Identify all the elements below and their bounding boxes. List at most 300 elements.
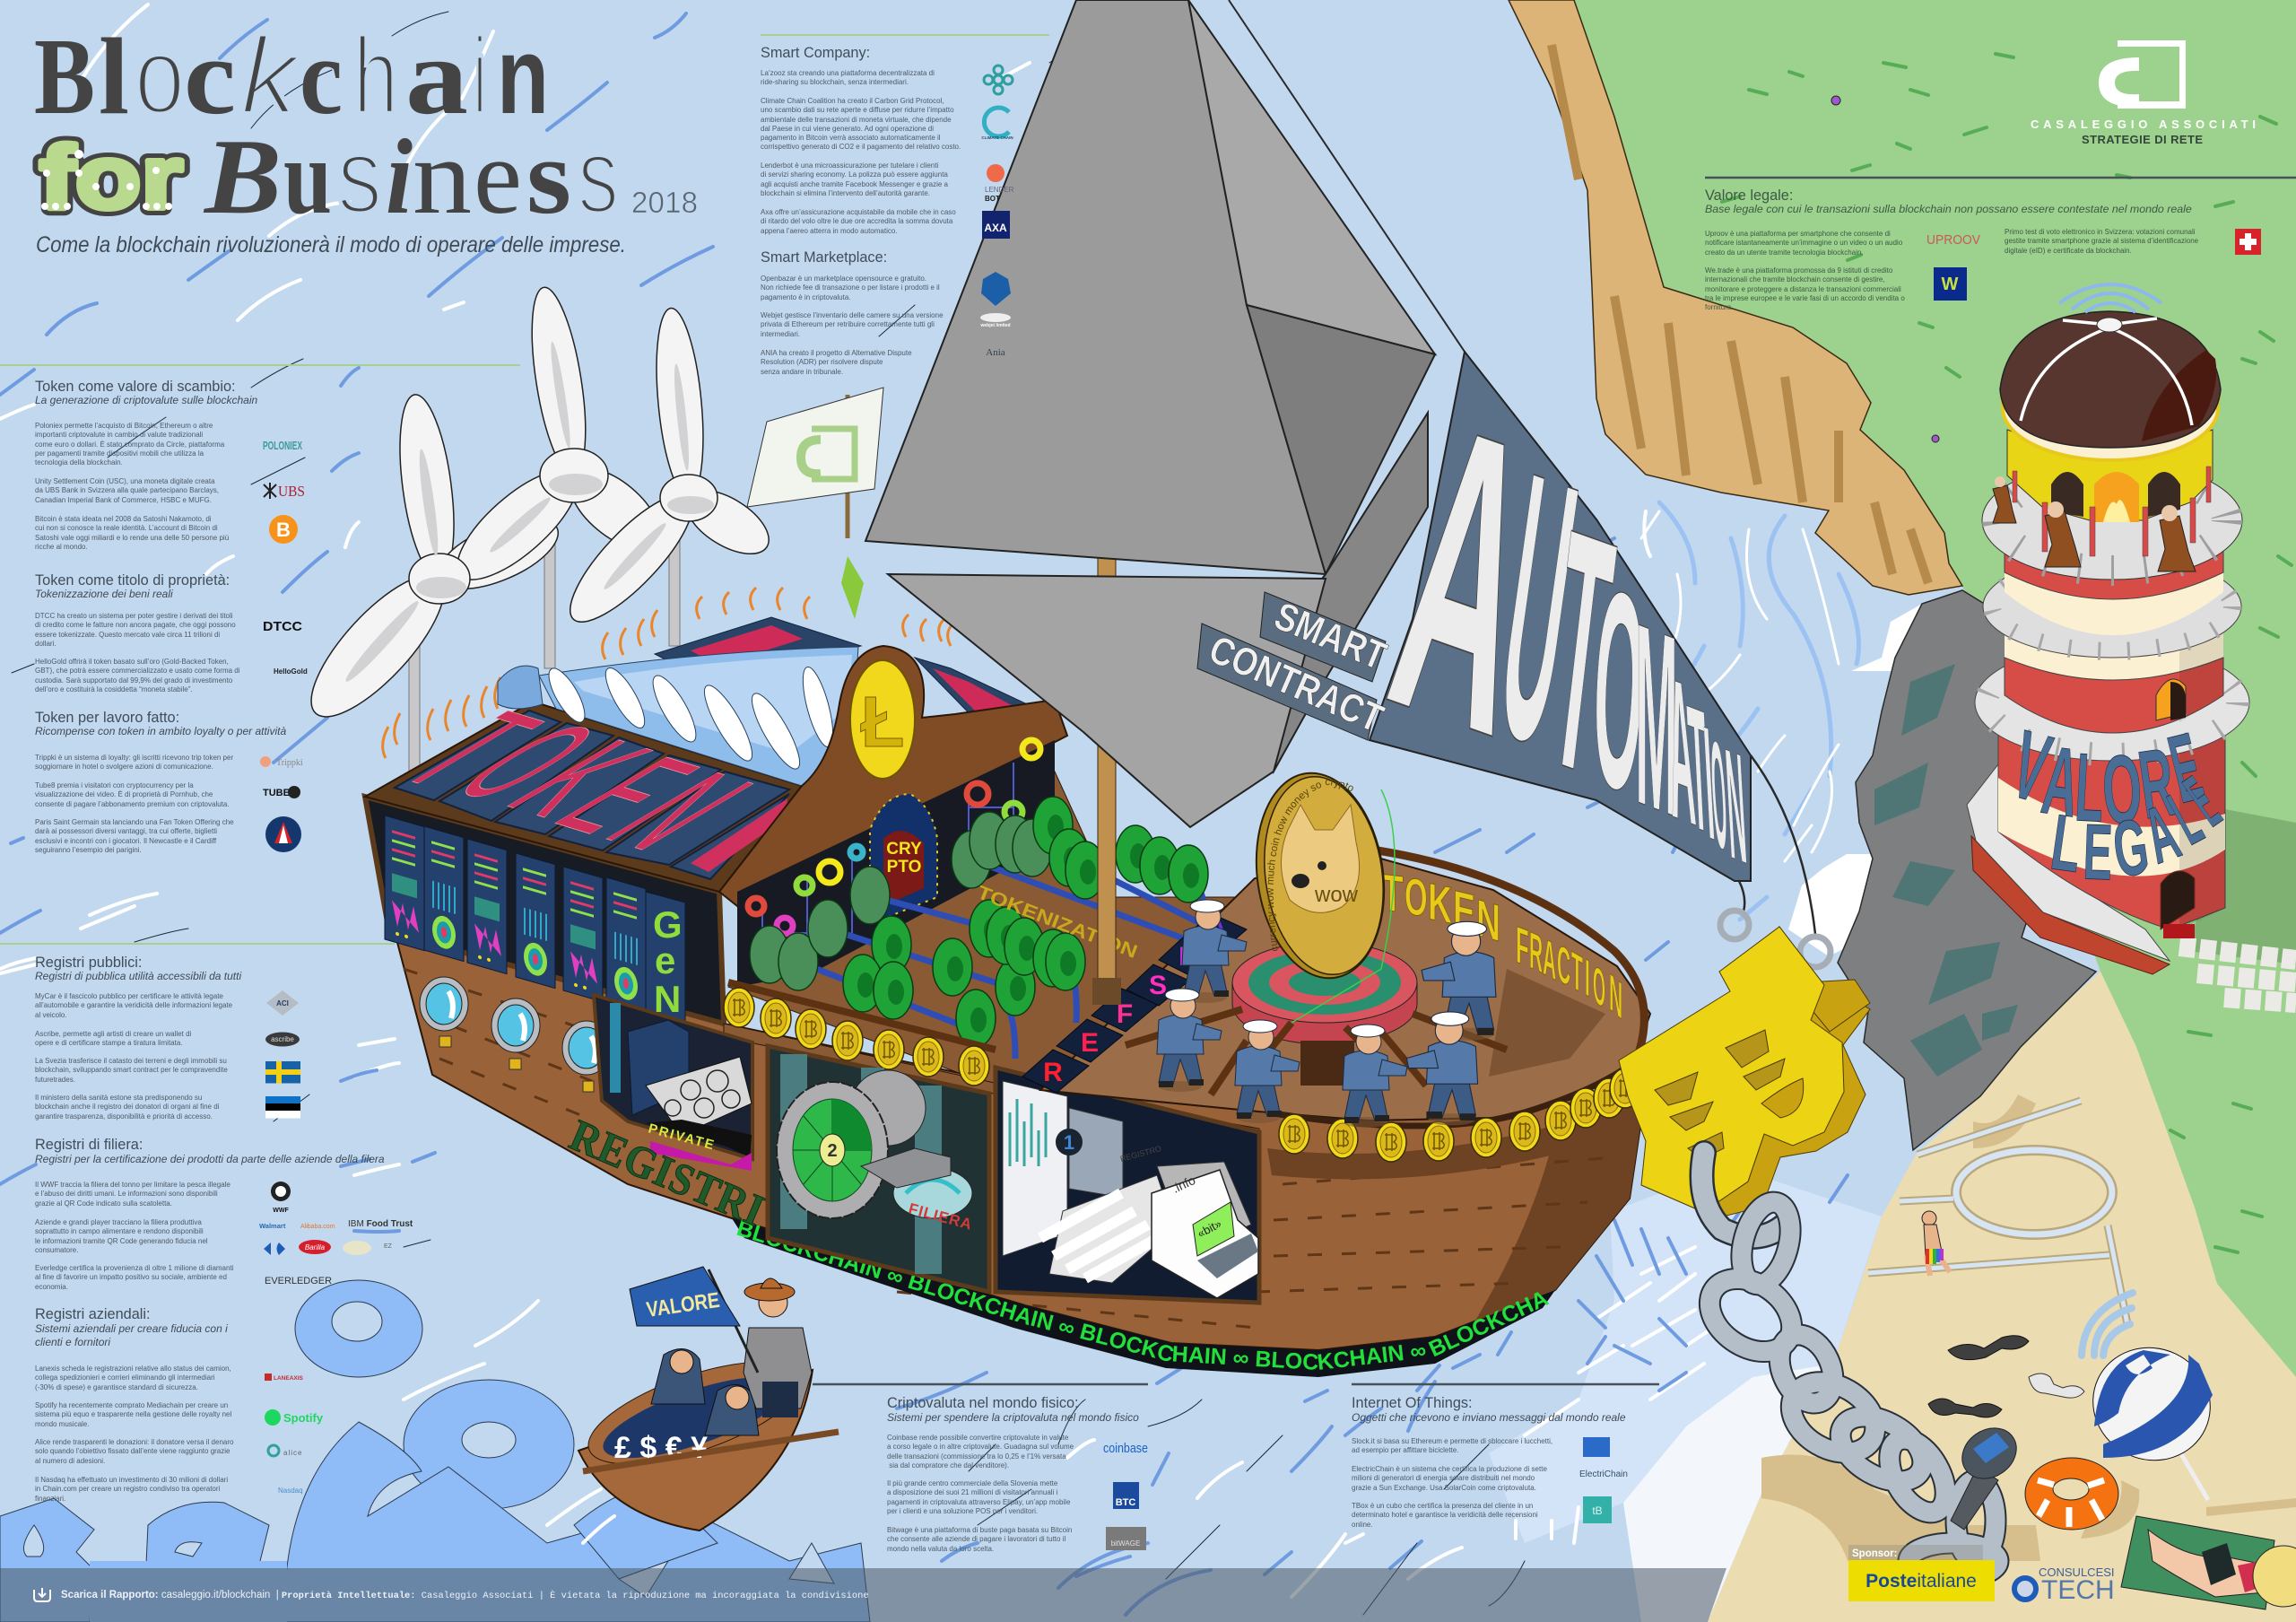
text: Registri aziendali: — [35, 1306, 151, 1322]
text: pagamenti in criptovaluta attraverso Elipay, un’app mobile — [887, 1498, 1070, 1505]
ship — [361, 558, 1652, 1377]
text: Base legale con cui le transazioni sulla blockchain non possano essere contestate nel mondo reale — [1705, 203, 2192, 215]
text: senza andare in tribunale. — [761, 368, 843, 375]
brick base — [1971, 836, 2170, 974]
rigging rope — [1229, 0, 1465, 352]
text: La generazione di criptovalute sulle blockchain — [35, 394, 257, 406]
cliff streaks — [1552, 45, 1928, 583]
text: Satoshi vale oggi miliardi e lo rende una delle 50 persone più — [35, 533, 229, 542]
text: collega spedizionieri e corrieri eliminando gli intermediari — [35, 1373, 215, 1382]
prongs — [1813, 980, 1870, 1032]
dark rules — [813, 178, 2296, 1384]
automation banner: T — [1684, 667, 1712, 871]
title: 2018 — [631, 186, 698, 219]
panel: token come valore di scambio — [35, 379, 257, 551]
text: sia dal compratore che dal venditore). — [889, 1461, 1009, 1469]
bottom bar text: Scarica il Rapporto: casaleggio.it/blockchain | Proprietà Intellettuale: Casaleggio Associati | È vietata la riproduzione ma incoraggiata la condivisione — [61, 1590, 869, 1601]
sailors — [1157, 900, 1496, 1128]
GeN label: N — [654, 978, 681, 1020]
text: all’automobile e garantire la veridicità delle informazioni legate — [35, 1001, 232, 1009]
title: s — [526, 117, 571, 236]
logo climate chain — [981, 108, 1013, 140]
wind turbines — [291, 283, 779, 776]
abacus discs — [750, 797, 1208, 1047]
logo lenderbot: BOT — [985, 195, 1000, 203]
for circuit lettering: for — [39, 127, 183, 228]
text: come euro o dollari. È stato comprato da Circle, piattaforma — [35, 440, 224, 449]
token fraction text: T — [1381, 863, 1404, 924]
text: (-30% di spese) e garantisce standard di sicurezza. — [35, 1383, 198, 1391]
gable — [719, 646, 1067, 906]
automation banner: O — [1587, 527, 1651, 855]
text: Aziende e grandi player tracciano la filiera produttiva — [35, 1218, 202, 1226]
big blue water letters bottom left — [0, 1280, 870, 1622]
logo webjet: webjet limited — [979, 323, 1011, 328]
text: Il Nasdaq ha effettuato un investimento di 30 milioni di dollari — [35, 1476, 228, 1484]
text: Sistemi per spendere la criptovaluta nel mondo fisico — [887, 1411, 1139, 1424]
consulcesi tech logo: TECH — [2041, 1575, 2115, 1605]
sides — [1703, 927, 1870, 1220]
logo alice — [268, 1445, 302, 1457]
text: a disposizione dei suoi 21 millioni di visitatori annuali i — [887, 1488, 1057, 1496]
logo electricchain: ElectriChain — [1579, 1469, 1628, 1479]
umbrella — [2074, 1329, 2229, 1500]
text: Paris Saint Germain sta lanciando una Fan Token Offering che — [35, 818, 234, 826]
lighthouse sign: L — [2157, 774, 2215, 861]
text: essere tokenizzate. Questo mercato vale circa 11 trilioni di — [35, 630, 220, 639]
meadow flowers — [1831, 96, 1939, 442]
text: Non richiede fee di transazione o per listare i prodotti e il — [761, 283, 940, 292]
text: Trippki è un sistema di loyalty: gli iscritti ricevono trip token per — [35, 754, 233, 762]
text: le informazioni tramite QR Code generando fiducia nel — [35, 1236, 208, 1245]
logo tube8 — [263, 786, 300, 798]
text: fornitura. — [1705, 303, 1734, 311]
text: pagamento in Bitcoin verrà associato automaticamente il — [761, 134, 941, 142]
text: Unity Settlement Coin (USC), una moneta digitale creata — [35, 477, 215, 485]
title: h — [353, 14, 398, 136]
text: visualizzazione dei video. È di proprietà di Pornhub, che — [35, 790, 213, 798]
text: Il WWF traccia la filiera del tonno per limitare la pesca illegale — [35, 1181, 230, 1189]
logo tbox — [1583, 1496, 1612, 1523]
text: Criptovaluta nel mondo fisico: — [887, 1395, 1079, 1411]
beam and coins — [724, 982, 1259, 1141]
GeN label: G — [653, 903, 683, 946]
title: B — [203, 117, 282, 236]
text: Il più grande centro commerciale della Slovenia mette — [887, 1479, 1057, 1487]
roof — [365, 702, 802, 892]
text: Registri di pubblica utilità accessibili da tutti — [35, 970, 241, 982]
lighthouse green shadow — [2188, 809, 2296, 964]
text: corrispettivo generato di CO2 e il pagamento del relativo costo. — [761, 143, 961, 151]
logo bitcoin — [269, 515, 298, 544]
bowl — [1761, 1078, 1804, 1118]
text: Uproov è una piattaforma per smartphone che consente di — [1705, 230, 1891, 238]
logo trippki — [260, 756, 303, 768]
litecoin coin: Ł — [861, 682, 904, 762]
logo ascribe: ascribe — [271, 1035, 294, 1043]
white surf — [1623, 1364, 1833, 1622]
wood planks — [404, 969, 1614, 1328]
text: TBox è un cubo che certifica la presenza del cliente in un — [1352, 1502, 1533, 1510]
logo bitwage — [1106, 1527, 1146, 1550]
logo ascribe — [265, 1032, 300, 1046]
lighthouse sign: E — [2160, 711, 2212, 824]
text: seguiranno l’esempio dei parigini. — [35, 846, 142, 854]
low ledge — [1967, 764, 2170, 961]
logo axa: AXA — [984, 222, 1007, 234]
mid body — [2005, 619, 2223, 733]
ubs keys — [264, 483, 276, 499]
title: B — [34, 16, 95, 137]
crypto door — [870, 794, 937, 924]
GeN label: e — [655, 939, 675, 981]
token fraction text: A — [1543, 928, 1556, 992]
logo ubs: UBS — [278, 483, 305, 500]
logo psg — [265, 816, 301, 852]
text: internazionali che tramite blockchain consente di gestire, — [1705, 275, 1885, 283]
lighthouse — [1967, 284, 2249, 974]
text: per i clienti e una soluzione POS per i venditori. — [887, 1507, 1038, 1515]
text: blockchain anche il registro dei donatori di organi al fine di — [35, 1103, 219, 1111]
private compartment: PRIVATE — [647, 1121, 718, 1154]
lighthouse sign: A — [2036, 727, 2086, 839]
panel: registri pubblici — [35, 955, 242, 1120]
text: Valore legale: — [1705, 187, 1793, 204]
flag estonia — [265, 1096, 300, 1118]
text: ricche al mondo. — [35, 543, 88, 551]
title: n — [497, 14, 549, 136]
wood floor — [728, 772, 1259, 1090]
text: Bitwage è una piattaforma di buste paga basata su Bitcoin — [887, 1526, 1072, 1534]
orange flames — [383, 588, 953, 758]
lighthouse sign: A — [2133, 788, 2189, 880]
panel: smart marketplace — [761, 249, 944, 375]
text: da UBS Bank in Svizzera alla quale partecipano Barclays, — [35, 486, 219, 494]
face — [1619, 927, 1844, 1212]
blue boat flag: VALORE — [645, 1288, 721, 1322]
text: Slock.it si basa su Ethereum e permette di sbloccare i lucchetti, — [1352, 1437, 1552, 1445]
rock shading — [1874, 664, 2018, 1077]
text: Lanexis scheda le registrazioni relative allo status dei camion, — [35, 1365, 231, 1373]
text: Smart Marketplace: — [761, 249, 887, 266]
logo everledger: EVERLEDGER — [265, 1276, 332, 1286]
server racks — [385, 815, 685, 1025]
lower body — [1998, 733, 2225, 929]
grass tufts — [1722, 54, 2292, 1252]
rowing boat: £ $ € ¥ — [614, 1431, 708, 1465]
title: u — [283, 117, 332, 236]
panel: valore legale — [1705, 187, 2198, 311]
poste italiane logo: Posteitaliane — [1866, 1571, 1977, 1591]
registry compartment: 1 — [1064, 1131, 1074, 1154]
text: mondo musicale. — [35, 1419, 89, 1428]
automation banner: M — [1635, 569, 1678, 873]
text: in Chain.com per creare un registro condiviso tra operatori — [35, 1485, 220, 1493]
logo we.trade: W — [1942, 275, 1959, 294]
lighthouse sign: L — [2046, 798, 2087, 889]
rail band — [1267, 1099, 1641, 1179]
text: Webjet gestisce l’inventario delle camere su una versione — [761, 311, 944, 319]
logo btc city — [1113, 1482, 1139, 1509]
for circuit lettering: for — [39, 127, 183, 228]
lighthouse sign: L — [2073, 732, 2107, 842]
text: ANIA ha creato il progetto di Alternative Dispute — [761, 349, 912, 357]
text: blockchain, sviluppando smart contract per le compravendite — [35, 1066, 228, 1074]
doge coin: currency wow much coin how money so crypto — [1267, 779, 1353, 951]
text: a corso legale o in altre criptovalute. Guadagna sul volume — [887, 1443, 1074, 1451]
top sail — [865, 0, 1435, 574]
wave tube — [539, 647, 858, 786]
token fraction text: O — [1405, 868, 1428, 929]
text: grazie al QR Code indicato sulla scatoletta. — [35, 1199, 172, 1208]
logo wwf — [271, 1182, 291, 1214]
text: La Svezia trasferisce il catasto dei terreni e degli immobili su — [35, 1057, 227, 1065]
title: l — [99, 16, 129, 137]
hull — [396, 936, 1646, 1350]
text: finanziari. — [35, 1495, 65, 1502]
abacus rods — [798, 858, 1202, 1032]
token fraction text: F — [1516, 915, 1529, 978]
logo carrefour — [264, 1243, 285, 1255]
logo bitcoin: B — [276, 519, 291, 541]
text: Registri di filiera: — [35, 1137, 143, 1153]
text: importanti criptovalute in cambio di valute tradizionali — [35, 431, 203, 439]
rail coins — [1279, 1068, 1640, 1162]
automation banner: T — [1535, 458, 1627, 847]
cliff — [1509, 0, 1962, 595]
GeN label — [653, 903, 683, 1020]
title: s — [337, 116, 382, 236]
text: Token per lavoro fatto: — [35, 710, 179, 726]
text: uno scambio dati su rete aperte e diffuse per ridurre l’impatto — [761, 106, 954, 114]
rocks — [1838, 590, 2096, 1150]
registry compartment: «bit» — [1195, 1216, 1223, 1241]
text: grazie a Sun Exchange. Usa SolarCoin come criptovaluta. — [1352, 1484, 1536, 1491]
text: Sistemi aziendali per creare fiducia con i — [35, 1322, 228, 1335]
flag sweden — [265, 1061, 300, 1084]
casaleggio logo — [2031, 40, 2256, 146]
anchor ropes and eyes — [1720, 755, 1831, 967]
logos: tokens — [259, 65, 2261, 1550]
gallery — [1982, 461, 2242, 580]
text: appena l’aereo atterra in modo automatico. — [761, 226, 898, 235]
swimmer — [1922, 1211, 1950, 1276]
title: s — [578, 116, 619, 236]
panel: registri di filiera — [35, 1137, 385, 1290]
text: agli acquisti anche tramite Facebook Messenger e grazie a — [761, 179, 948, 188]
server room — [365, 797, 724, 1024]
logo alibaba: Alibaba.com — [300, 1224, 335, 1230]
registry compartment — [996, 1068, 1259, 1303]
token fraction text: R — [1529, 921, 1543, 985]
blue boat flag — [630, 1267, 740, 1326]
token fraction text: C — [1557, 934, 1570, 998]
logo boccia — [343, 1241, 371, 1255]
crypto door: CRY — [886, 840, 922, 859]
rowing boat — [577, 1269, 839, 1530]
panel: smart company — [761, 45, 961, 235]
text: delle transazioni (commissione tra lo 0,25 e l’1% versata — [887, 1452, 1066, 1461]
text: intermediari. — [761, 330, 800, 337]
lifebuoy — [2025, 1458, 2118, 1530]
logo tube8: TUBE — [263, 788, 290, 798]
sponsor label: Sponsor: — [1852, 1548, 1897, 1559]
ledge three — [1975, 644, 2249, 761]
text: La’zooz sta creando una piattaforma decentralizzata di — [761, 69, 935, 77]
flag switzerland — [2235, 229, 2261, 255]
logo ez: EZ — [384, 1243, 393, 1250]
surf on rocks — [1788, 604, 1922, 956]
contract sign: CONTRACT — [1203, 627, 1389, 741]
text: economia. — [35, 1283, 68, 1290]
text: opere e di certificare stampe a tiratura limitata. — [35, 1039, 183, 1047]
panel: registri aziendali — [35, 1306, 233, 1502]
text: privata di Ethereum per retribuire correttamente tutti gli — [761, 320, 935, 328]
registri label: REGISTRI — [563, 1110, 772, 1236]
text: dell’oro e costituirà la cosiddetta “moneta stabile”. — [35, 685, 193, 693]
blockchain band — [732, 1218, 1555, 1377]
mast — [1098, 556, 1116, 1002]
text: di credito come le fatture non ancora pagate, che oggi possono — [35, 621, 236, 629]
lighthouse sign: G — [2108, 803, 2153, 894]
title: n — [413, 117, 472, 236]
logo nasdaq: Nasdaq — [278, 1487, 303, 1495]
text: esclusivi e incontri con i giocatori. Il Newcastle e il Cardiff — [35, 836, 216, 845]
portholes — [420, 977, 611, 1092]
text: Coinbase rende possibile convertire criptovalute in valute — [887, 1434, 1068, 1442]
automation banner: A — [1367, 334, 1563, 824]
window — [2156, 679, 2186, 720]
token fraction text: O — [1593, 954, 1605, 1022]
text: digitale (eID) e certificate da blockchain. — [2005, 246, 2132, 255]
text: soprattutto in campo alimentare e rendono disponibili — [35, 1227, 204, 1235]
sand shadows — [1761, 1094, 2296, 1561]
token fraction text: N — [1476, 888, 1500, 953]
logo tbox: tB — [1592, 1504, 1603, 1517]
logo laneaxis: LANEAXIS — [274, 1375, 304, 1382]
logo zooz — [984, 65, 1013, 94]
monks — [1993, 485, 2196, 571]
logo lenderbot: LENDER — [985, 186, 1014, 194]
logo aci: ACI — [276, 999, 289, 1007]
tokenization label: TOKENIZATION — [974, 882, 1140, 963]
logo barilla: Barilla — [305, 1243, 326, 1251]
text: al veicolo. — [35, 1010, 67, 1019]
panel: internet of things — [1352, 1395, 1626, 1529]
lighthouse sign: E — [2082, 808, 2114, 897]
front rail — [1267, 1062, 1634, 1126]
title: e — [474, 117, 522, 236]
bottom bar — [0, 1568, 1726, 1622]
text: per pagamenti tramite dispositivi mobili che utilizza la — [35, 449, 204, 458]
dome — [2003, 356, 2218, 460]
text: Smart Company: — [761, 45, 870, 61]
text: HelloGold offrirà il token basato sull’oro (Gold-Backed Token, — [35, 658, 229, 666]
back rail — [1378, 850, 1644, 1059]
text: ride-sharing su blockchain, senza intermediari. — [761, 78, 909, 86]
text: ElectricChain è un sistema che certifica la produzione di sette — [1352, 1465, 1547, 1473]
logo aci — [266, 990, 299, 1016]
arches — [2051, 472, 2180, 517]
logo uproov: UPROOV — [1926, 232, 1980, 248]
text: Spotify ha recentemente comprato Mediachain per creare un — [35, 1401, 228, 1409]
automation banner: O — [1707, 707, 1731, 884]
lighthouse sign: E — [2170, 760, 2234, 842]
logo spotify — [265, 1409, 324, 1426]
token fraction text — [1381, 863, 1622, 1032]
deck — [1040, 858, 1650, 1121]
token fraction text: K — [1428, 873, 1452, 935]
text: determinato hotel e garantisce la veridicità delle recensioni — [1352, 1511, 1538, 1519]
automation banner: A — [1664, 634, 1699, 869]
text: Token come titolo di proprietà: — [35, 572, 230, 589]
text: ambientale delle transazioni di moneta virtuale, che dipende — [761, 115, 952, 124]
green land — [1574, 0, 2296, 1377]
text: Climate Chain Coalition ha creato il Carbon Grid Protocol, — [761, 97, 944, 105]
text: notificare istantaneamente un’immagine o un video o un audio — [1705, 239, 1902, 247]
logo ania: Ania — [986, 347, 1005, 358]
text: DTCC ha creato un sistema per poter gestire i derivati dei titoli — [35, 612, 233, 620]
consulcesi tech logo — [2014, 1565, 2115, 1605]
text: Lenderbot è una microassicurazione per tutelare i clienti — [761, 161, 938, 170]
text: ad esempio per affittare biciclette. — [1352, 1446, 1458, 1454]
title: i — [386, 117, 413, 236]
towel and sunbather — [2121, 1516, 2296, 1609]
title: c — [184, 16, 236, 137]
text: Tokenizzazione dei beni reali — [35, 588, 173, 600]
text: tecnologia della blockchain. — [35, 458, 123, 467]
token fraction text: I — [1585, 948, 1590, 1009]
text: di ritardo del volo oltre le due ore accredita la somma dovuta — [761, 217, 952, 225]
automation banner: U — [1483, 392, 1594, 826]
blockchain band text: BLOCKCHAIN ∞ BLOCKCHAIN ∞ BLOCKCHAIN ∞ BLOCKCHAIN ∞ BLOCKCHAIN — [737, 1220, 1550, 1370]
gears compartment — [768, 1046, 989, 1292]
crypto door: PTO — [887, 858, 921, 876]
logo bitwage: bitWAGE — [1111, 1539, 1140, 1548]
wifi sand — [2082, 1293, 2133, 1356]
text: We.trade è una piattaforma promossa da 9 istituti di credito — [1705, 266, 1892, 275]
text: online. — [1352, 1520, 1373, 1529]
text: Poloniex permette l’acquisto di Bitcoin, Ethereum o altre — [35, 422, 213, 430]
logo alice: alice — [283, 1449, 302, 1457]
token fraction text: T — [1571, 941, 1583, 1005]
title: c — [300, 16, 343, 137]
green rules — [0, 35, 1049, 944]
logo trippki: Trippki — [276, 758, 303, 768]
TOKEN letters: N — [566, 751, 792, 872]
automation banner — [1367, 334, 1751, 898]
frieze — [2007, 430, 2213, 520]
text: cui non si conosce la reale identità. L’account di Bitcoin di — [35, 524, 218, 532]
transfer letters strip — [1022, 913, 1247, 1093]
text: garantire trasparenza, disponibilità e priorità di accesso. — [35, 1112, 213, 1120]
text: dollari. — [35, 640, 57, 648]
text: al numero di adesioni. — [35, 1457, 105, 1464]
smart sign: SMART — [1268, 594, 1393, 679]
foam by shore — [1489, 1166, 1882, 1543]
text: sistema più equo e trasparente nella gestione delle royalty nel — [35, 1410, 231, 1418]
text: Alice rende trasparenti le donazioni: il donatore versa il denaro — [35, 1438, 233, 1446]
registry compartment: REGISTRO — [1119, 1144, 1162, 1164]
logo walmart: Walmart — [259, 1222, 286, 1230]
drones — [1928, 1336, 2029, 1417]
TOKEN letters: O — [416, 702, 639, 822]
text: Il ministero della sanità estone sta predisponendo su — [35, 1094, 202, 1102]
sand beach — [1708, 972, 2296, 1622]
back roof slabs — [655, 617, 1037, 731]
logo we.trade — [1934, 267, 1967, 301]
logo webjet — [979, 313, 1011, 328]
